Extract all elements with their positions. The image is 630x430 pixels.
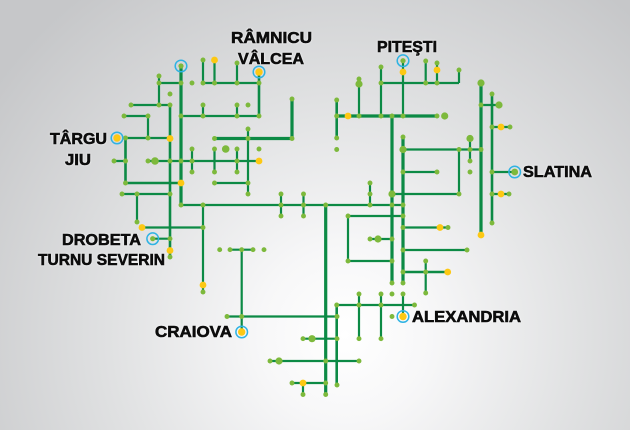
city: Târgu Jiu: JIU bbox=[65, 152, 91, 169]
city: Pitești: PITEŞTI bbox=[377, 39, 437, 56]
yellow nodes bbox=[139, 57, 504, 386]
large green nodes bbox=[151, 79, 503, 365]
city marker: northern node bbox=[175, 60, 187, 72]
city: Craiova: CRAIOVA bbox=[155, 324, 232, 341]
city: Drobeta Turnu Severin bbox=[38, 232, 165, 269]
city: Drobeta Turnu Severin: TURNU SEVERIN bbox=[38, 252, 165, 269]
city: Alexandria: ALEXANDRIA bbox=[412, 309, 521, 326]
city: Târgu Jiu: TÂRGU bbox=[50, 129, 107, 148]
network lines: east cluster bbox=[337, 61, 515, 293]
network lines: west cluster bbox=[114, 60, 403, 292]
city: Pitești bbox=[377, 39, 437, 66]
network lines: south cluster bbox=[227, 205, 414, 394]
city: Râmnicu Vâlcea: RÂMNICU bbox=[231, 28, 312, 47]
city: Târgu Jiu bbox=[50, 129, 123, 169]
city: Râmnicu Vâlcea: VÂLCEA bbox=[238, 49, 304, 68]
city: Slatina: SLATINA bbox=[523, 164, 592, 181]
city: Drobeta Turnu Severin: DROBETA bbox=[62, 232, 141, 249]
city: Râmnicu Vâlcea bbox=[231, 28, 312, 78]
small green nodes bbox=[112, 58, 512, 397]
